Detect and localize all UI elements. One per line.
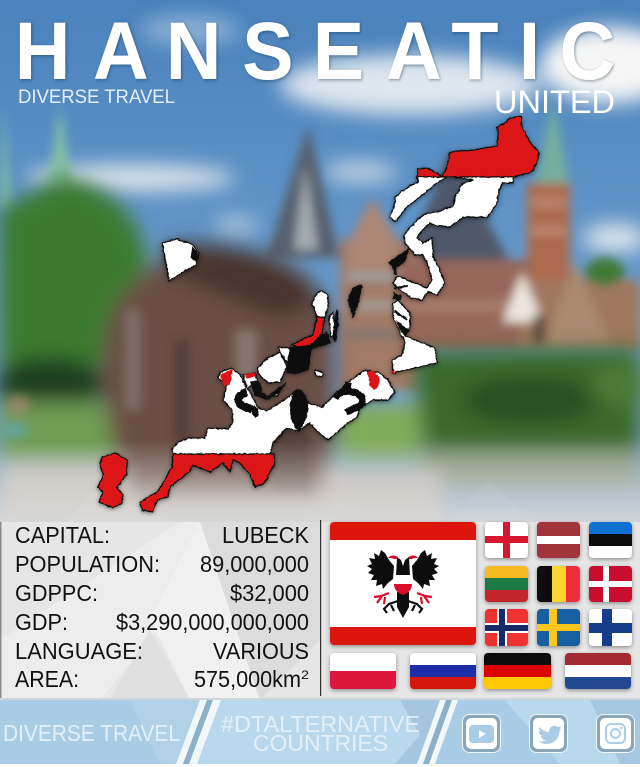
icon: double-headed eagle <box>367 550 439 618</box>
stats panel <box>0 520 640 700</box>
map in flag colours <box>98 116 539 512</box>
flag: Estonia <box>589 522 632 558</box>
map: eastern Baltic coast <box>393 177 513 300</box>
icon: Twitter <box>530 714 568 752</box>
stats text rows: LANGUAGE: <box>15 638 143 664</box>
subtitle: united: UNITED <box>494 84 615 120</box>
stats text rows: $3,290,000,000,000 <box>116 609 309 635</box>
map: eagle fragments <box>190 246 410 431</box>
flag: England <box>485 522 528 558</box>
stats text rows: AREA: <box>15 666 79 692</box>
flag: Hanseatic main flag with eagle <box>330 522 476 645</box>
map: continental coast red <box>140 454 275 512</box>
map: far north red region <box>417 116 539 177</box>
footer text: countries: COUNTRIES <box>253 730 388 756</box>
stats text rows: CAPITAL: <box>15 522 110 548</box>
flag: Latvia <box>537 522 580 558</box>
stats text rows: POPULATION: <box>15 551 160 577</box>
map: coastal strip <box>392 300 437 373</box>
flag: Poland <box>330 653 396 689</box>
flag: Denmark <box>589 566 632 602</box>
slash divider left <box>176 700 221 764</box>
flag: Sweden <box>537 609 580 646</box>
map: Gotland <box>348 285 362 317</box>
footer text: hashtag: #DTALTERNATIVE <box>221 711 420 737</box>
stats text rows: $32,000 <box>230 580 309 606</box>
icon: Instagram <box>596 714 634 752</box>
map: continental coast white <box>172 368 395 454</box>
flag: Finland <box>589 609 632 646</box>
icon: YouTube <box>462 714 500 752</box>
map: Iceland <box>162 239 199 281</box>
flag: Belgium <box>537 566 580 602</box>
stats text rows: LUBECK <box>222 522 310 548</box>
stats text rows: VARIOUS <box>213 638 309 664</box>
footer bar <box>0 698 640 764</box>
slash divider right <box>417 700 458 764</box>
flags: small country flags <box>330 522 632 689</box>
footer text: diverse travel: DIVERSE TRAVEL <box>3 720 180 746</box>
stats text rows: 575,000km <box>194 666 301 692</box>
stats text rows: GDP: <box>15 609 68 635</box>
flag: Russia <box>410 653 476 689</box>
background photo: blurred Holsten Gate scene <box>0 0 640 530</box>
stats text rows <box>15 522 310 692</box>
flag: Germany <box>484 653 551 689</box>
subtitle: diverse travel: DIVERSE TRAVEL <box>18 87 175 108</box>
stats text rows: 89,000,000 <box>200 551 309 577</box>
flag: Norway <box>485 609 528 646</box>
map: Denmark islands <box>258 352 287 383</box>
stats text rows: GDPPC: <box>15 580 98 606</box>
title: HANSEATIC <box>15 5 615 97</box>
flag: Lithuania <box>485 566 528 602</box>
map: northern arm <box>390 177 447 222</box>
flag: Netherlands <box>565 653 631 689</box>
stats text rows: 2 <box>301 668 309 682</box>
map: Britain <box>98 453 127 508</box>
map: red patches <box>220 369 233 386</box>
